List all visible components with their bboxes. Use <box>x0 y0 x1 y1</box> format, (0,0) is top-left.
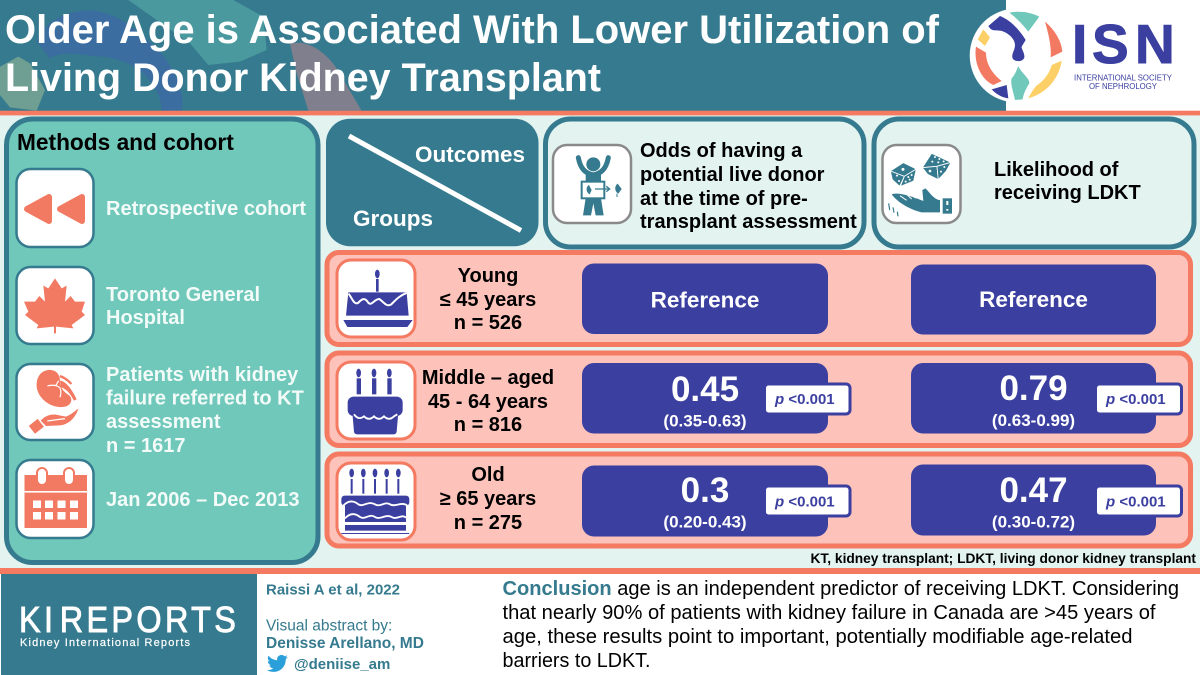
text: patients: assessment <box>106 411 221 433</box>
title: Older Age is Associated With Lower Utilization of <box>5 8 940 52</box>
conclusion text <box>502 578 1179 672</box>
text: patients: failure referred to KT <box>106 388 304 410</box>
text: old group: Old <box>471 464 505 486</box>
text: patients: Patients with kidney <box>106 364 299 386</box>
icon: cake five candles <box>337 463 415 540</box>
box: likelihood middle-aged: 0.79 <box>999 369 1068 408</box>
footer: citation and author <box>266 582 424 673</box>
box: odds middle-aged: 0.45 <box>671 370 739 409</box>
p value tag: p <0.001 <box>774 494 835 510</box>
box: odds old <box>582 466 850 536</box>
ISN logo: S <box>1092 13 1129 75</box>
text: middle-aged group: Middle – aged <box>422 367 554 389</box>
footer: KI Reports logo: KI REPORTS <box>19 600 236 640</box>
text: young group: ≤ 45 years <box>440 289 536 311</box>
text: young group: n = 526 <box>454 312 522 334</box>
icon: rewind <box>16 169 94 247</box>
text: middle-aged group: n = 816 <box>454 414 522 436</box>
row: old group <box>327 454 1190 546</box>
panel: methods and cohort <box>6 119 318 562</box>
conclusion text: that nearly 90% of patients with kidney failure in Canada are >45 years of <box>502 602 1156 624</box>
box: odds old: 0.3 <box>681 471 729 510</box>
text: young group: Young <box>458 265 518 287</box>
box: reference likelihood <box>911 264 1156 334</box>
ISN logo: OF NEPHROLOGY <box>1089 82 1158 91</box>
p value tag: p <0.001 <box>1105 494 1166 510</box>
box: likelihood middle-aged <box>911 363 1182 434</box>
p value tag <box>1096 384 1182 414</box>
p value tag <box>764 384 850 414</box>
conclusion text: age, these results point to important, potentially modifiable age-related <box>502 626 1132 648</box>
panel: groups and outcomes: Outcomes <box>415 142 525 167</box>
text: odds of having a potential live donor: transplant assessment <box>640 211 857 233</box>
text: study dates: Jan 2006 – Dec 2013 <box>106 489 300 511</box>
footer: citation and author: Raissi A et al, 2022 <box>266 582 400 598</box>
icon: dice and hand <box>882 145 960 223</box>
panel: outcome likelihood of receiving LDKT <box>874 119 1194 247</box>
box: odds old: (0.20-0.43) <box>663 512 747 532</box>
ISN logo: INTERNATIONAL SOCIETY <box>1074 74 1173 82</box>
text: toronto general hospital: Hospital <box>106 307 185 329</box>
p value tag: p <0.001 <box>1105 391 1166 408</box>
text: odds of having a potential live donor: at the time of pre- <box>640 188 808 210</box>
box: odds middle-aged <box>582 363 850 434</box>
box: odds middle-aged: (0.35-0.63) <box>663 412 747 430</box>
box: reference odds: Reference <box>651 288 759 312</box>
text: odds of having a potential live donor <box>640 140 857 233</box>
conclusion text: barriers to LDKT. <box>502 650 650 672</box>
icon: cake three candles <box>337 362 415 439</box>
box: likelihood old: (0.30-0.72) <box>992 512 1075 532</box>
icon: calendar <box>16 460 94 538</box>
footer: citation and author: Denisse Arellano, MD <box>266 635 424 652</box>
text: middle-aged group <box>422 367 554 436</box>
footer: KI Reports logo <box>1 574 257 675</box>
icon: cake one candle <box>337 260 415 337</box>
title <box>5 8 940 100</box>
text: retrospective cohort: Retrospective cohort <box>106 198 306 220</box>
box: reference odds <box>582 264 828 334</box>
text: likelihood of receiving LDKT: Likelihood of <box>994 159 1119 181</box>
panel: groups and outcomes: Groups <box>353 206 433 231</box>
text: old group: ≥ 65 years <box>440 488 536 510</box>
ISN logo <box>970 0 1200 111</box>
text: odds of having a potential live donor: potential live donor <box>640 164 825 186</box>
text: old group: n = 275 <box>454 512 522 534</box>
footnote: abbreviations: KT, kidney transplant; LDKT, living donor kidney transplant <box>810 550 1196 566</box>
panel: outcome odds of potential live donor <box>546 119 864 247</box>
p value tag: p <0.001 <box>774 391 835 408</box>
icon: person with kidney donation <box>553 145 631 223</box>
ISN logo: I <box>1072 13 1087 75</box>
text: young group <box>440 265 536 334</box>
footer: citation and author: @deniise_am <box>294 656 390 673</box>
text: odds of having a potential live donor: Odds of having a <box>640 140 803 162</box>
text: middle-aged group: 45 - 64 years <box>428 391 548 413</box>
p value tag <box>764 486 850 516</box>
ISN logo: N <box>1135 13 1175 75</box>
text: patients <box>106 364 304 457</box>
text: toronto general hospital <box>106 284 260 329</box>
footer: KI Reports logo: Kidney International Reports <box>20 637 190 649</box>
conclusion text: Conclusion age is an independent predictor of receiving LDKT. Considering <box>502 578 1179 600</box>
header banner <box>0 0 1006 111</box>
text: patients: n = 1617 <box>106 435 186 457</box>
icon: kidney in hand <box>16 364 94 440</box>
footer: citation and author: Visual abstract by: <box>266 618 392 634</box>
text: likelihood of receiving LDKT: receiving LDKT <box>994 182 1141 204</box>
text: old group <box>440 464 536 534</box>
text: likelihood of receiving LDKT <box>994 159 1141 204</box>
row: young group <box>327 252 1190 344</box>
title: Living Donor Kidney Transplant <box>5 56 601 100</box>
p value tag <box>1096 486 1182 516</box>
icon: twitter bird <box>267 655 288 672</box>
box: reference likelihood: Reference <box>979 287 1088 312</box>
box: likelihood middle-aged: (0.63-0.99) <box>992 411 1075 430</box>
panel: groups and outcomes <box>326 119 538 246</box>
text: toronto general hospital: Toronto General <box>106 284 260 306</box>
box: likelihood old <box>911 464 1182 536</box>
icon: maple leaf <box>16 267 94 344</box>
heading: methods and cohort: Methods and cohort <box>17 129 234 155</box>
row: middle-aged group <box>327 353 1190 446</box>
box: likelihood old: 0.47 <box>999 471 1068 510</box>
